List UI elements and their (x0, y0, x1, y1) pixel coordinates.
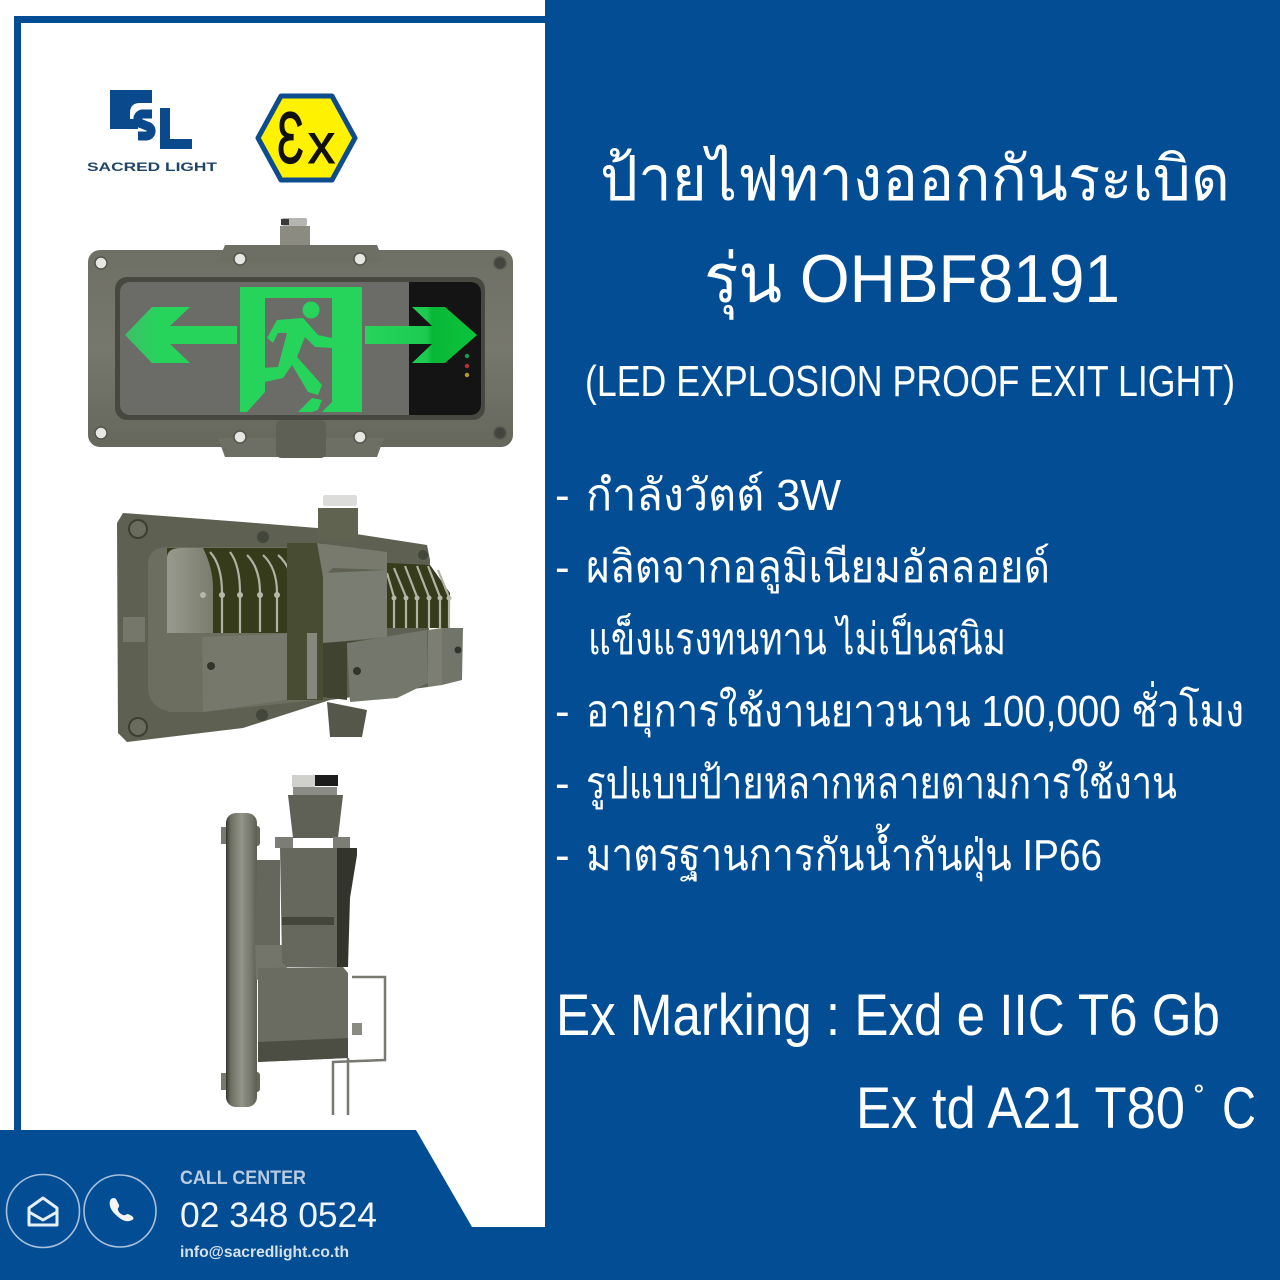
spec list: - (555, 687, 570, 736)
Ex marking (556, 983, 1256, 1141)
right blue panel (545, 0, 1280, 1280)
left white panel with blue frame (14, 16, 545, 1130)
call center text: CALL CENTER (180, 1167, 306, 1189)
footer contact band: 02 348 0524 (180, 1196, 377, 1235)
screws (95, 253, 506, 443)
title: ป้ายไฟทางออกกันระเบิด (600, 144, 1230, 214)
title (585, 144, 1235, 406)
spec list: มาตรฐานการกันน้ำกันฝุ่น IP66 (586, 823, 1102, 882)
spec list: - (555, 471, 570, 520)
spec list: - (555, 543, 570, 592)
product: front view of exit light (88, 218, 513, 458)
spec list: ผลิตจากอลูมิเนียมอัลลอยด์ (586, 543, 1050, 594)
logo: Sacred Light: SACRED LIGHT (87, 162, 217, 174)
spec list: - (555, 759, 570, 808)
exit sign green pictogram (125, 287, 477, 412)
icon: phone circle (84, 1175, 156, 1247)
running figure (253, 302, 332, 412)
frame inset (115, 277, 485, 420)
icon: Ex hexagon: x (308, 112, 335, 175)
icon: envelope circle (6, 1174, 80, 1248)
footer contact band: info@sacredlight.co.th (180, 1244, 349, 1261)
spec list: กำลังวัตต์ 3W (586, 471, 841, 520)
icon: Ex hexagon (258, 96, 355, 180)
spec list: รูปแบบป้ายหลากหลายตามการใช้งาน (586, 758, 1177, 810)
Ex marking: ˚ (1194, 1082, 1205, 1120)
logo: Sacred Light (87, 90, 217, 174)
product: side view (221, 775, 385, 1115)
Ex marking: Ex td A21 T80 (856, 1076, 1185, 1141)
Ex marking: C (1222, 1076, 1256, 1141)
status LEDs (465, 354, 469, 358)
title: รุ่น OHBF8191 (704, 241, 1120, 320)
spec list: แข็งแรงทนทาน ไม่เป็นสนิม (588, 613, 1006, 664)
product: rear view with fins (117, 495, 463, 742)
spec list: - (555, 831, 570, 880)
icon: Ex hexagon: Ɛ (277, 99, 304, 179)
spec list (555, 471, 1244, 882)
footer contact band (0, 1130, 545, 1280)
